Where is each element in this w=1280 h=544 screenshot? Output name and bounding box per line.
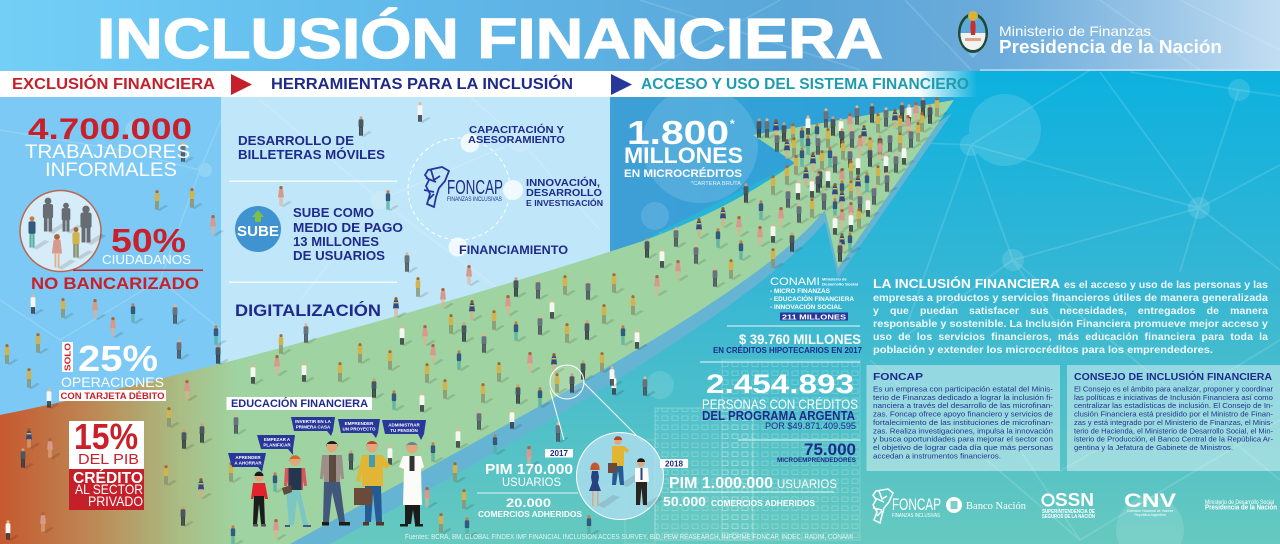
text: definition paragraph: es el acceso y uso de las personas y las — [1064, 279, 1268, 291]
panel: FONCAP: zas. Realiza investigaciones, impulsa la innovación — [873, 426, 1053, 435]
panel: financial inclusion council: El Consejo es el ámbito para analizar, proponer y coordinar — [1074, 384, 1274, 394]
tool: SUBE payment: SUBE COMO — [293, 205, 374, 220]
diagram: FONCAP cycle — [408, 123, 603, 257]
panel: tools background — [221, 97, 610, 400]
stat: 25% debit card: OPERACIONES — [61, 374, 164, 390]
text: definition paragraph: LA INCLUSIÓN FINANCIERA — [873, 276, 1061, 291]
stat: CONAMI: CONAMI — [770, 276, 820, 288]
stat: PIM 2017: 2017 — [550, 449, 569, 458]
text: innovation — [526, 176, 603, 208]
text: training: CAPACITACIÓN Y — [469, 123, 564, 136]
heading: access: ACCESO Y USO DEL SISTEMA FINANCIERO — [641, 76, 969, 93]
tool: digitalization: DIGITALIZACIÓN — [235, 301, 381, 320]
panel: financial inclusion council: terio de Hacienda, el Ministerio de Desarrollo Social, el Min- — [1074, 426, 1274, 435]
figure: man in grey jacket — [320, 441, 350, 526]
panel: financial inclusion council: gentina y la Jefatura de Gabinete de Ministros. — [1074, 443, 1233, 452]
stat: PIM 2017: COMERCIOS ADHERIDOS — [478, 509, 582, 519]
stat: PIM 2018: 50.000 — [663, 494, 706, 509]
stat: PIM 2017: PIM 170.000 — [485, 461, 573, 478]
text: definition paragraph — [873, 276, 1268, 356]
magnifier: zoom lens — [550, 365, 664, 520]
text: definition paragraph: población y extender los microcréditos para los emprendedores. — [873, 344, 1213, 356]
icon: circle of citizens — [20, 190, 106, 272]
speech bubble: project — [338, 419, 380, 438]
stat: 1800 million microcredits: * — [730, 117, 735, 131]
stat: 50% citizens unbanked: 50% — [111, 222, 186, 259]
network pattern — [640, 0, 1280, 544]
figure: yellow man in lens — [608, 436, 643, 487]
stat: PIM 2018: COMERCIOS ADHERIDOS — [711, 498, 815, 508]
stat: CONAMI: - EDUCACIÓN FINANCIERA — [770, 294, 854, 303]
stat: CONAMI: - INNOVACIÓN SOCIAL — [770, 302, 842, 311]
logo: social development ministry — [1205, 500, 1277, 512]
speech bubble: pension — [382, 420, 426, 440]
title: INCLUSIÓN FINANCIERA — [97, 7, 883, 71]
icon: FONCAP map logo — [424, 167, 449, 207]
green growth arrow — [0, 100, 954, 544]
stat: PIM 2017 — [477, 449, 582, 519]
stat: 25% debit card — [59, 338, 166, 401]
text: definition paragraph: uso de los servicios financieros, más educación financiera para toda la — [873, 331, 1268, 343]
heading: financial education: EDUCACIÓN FINANCIERA — [231, 397, 368, 410]
stat: 15% GDP credit: CRÉDITO — [73, 468, 143, 487]
panel: FONCAP: FONCAP — [873, 371, 923, 383]
logo: Banco Nación: Banco Nación — [966, 500, 1026, 512]
stat: mortgage credits: EN CRÉDITOS HIPOTECARIOS EN 2017 — [713, 346, 863, 355]
text: financing: FINANCIAMIENTO — [459, 243, 568, 257]
figure: woman in lens — [589, 462, 620, 508]
stat: 25% debit card: 25% — [78, 338, 158, 379]
stat: Argenta program: POR $49.871.409.595 — [765, 421, 856, 431]
panel: financial inclusion council: centralizar las estadísticas de inclusión. El Consejo de In- — [1074, 401, 1274, 410]
stat: informal workers: TRABAJADORES — [25, 142, 190, 163]
speech bubble: project: UN PROYECTO — [343, 426, 376, 432]
stat: 15% GDP credit: AL SECTOR — [75, 481, 143, 497]
stat: 1800 million microcredits — [624, 114, 743, 187]
logo: CNV: CNV — [1124, 491, 1176, 512]
speech bubble: first home: PRIMERA CASA — [296, 424, 331, 430]
speech bubble: plan: PLANIFICAR — [263, 442, 291, 448]
stat: microentrepreneurs: MICROEMPRENDEDORES — [777, 457, 857, 464]
text: advisory: ASESORAMIENTO — [468, 134, 565, 146]
logo: SSN: SEGUROS DE LA NACIÓN — [1042, 512, 1095, 520]
stat: 50% citizens unbanked: CIUDADANOS — [102, 252, 191, 267]
stat: PIM 2017: USUARIOS — [502, 475, 561, 489]
stat: CONAMI: - MICRO FINANZAS — [770, 288, 831, 295]
logo: SSN: SUPERINTENDENCIA DE — [1042, 509, 1096, 515]
figure: doctor — [399, 442, 424, 526]
panel: FONCAP: el objetivo de lograr cada día que más personas — [873, 443, 1053, 452]
tool: SUBE payment — [293, 205, 403, 263]
stat: PIM 2018 — [660, 459, 837, 509]
sources: Fuentes: BCRA, BM, GLOBAL FINDEX IMF FINANCIAL INCLUSION ACCES SURVEY, BID, PEW REASEARCH, INFORME FONCAP, INDEC, RADIM, CONAMI — [405, 532, 853, 541]
stat: informal workers — [25, 113, 192, 181]
speech bubble: first home: INVERTIR EN LA — [295, 419, 332, 424]
icon: national coat of arms — [958, 11, 988, 58]
stat: 15% GDP credit: PRIVADO — [88, 493, 143, 509]
speech bubble: plan — [257, 435, 295, 455]
ministry name — [999, 23, 1222, 57]
figure: boy in red — [251, 472, 268, 526]
stat: informal workers: 4.700.000 — [28, 113, 192, 146]
stat: PIM 2017: 20.000 — [506, 496, 551, 510]
stat: 25% debit card: SOLO — [62, 343, 72, 371]
arrow shadow band — [280, 113, 952, 544]
stat: 1800 million microcredits: MILLONES — [624, 143, 743, 168]
tool: SUBE payment: MEDIO DE PAGO — [293, 220, 403, 235]
text: definition paragraph: y que puedan satisfacer sus necesidades, entregados de manera — [873, 305, 1268, 317]
speech bubble: save: APRENDER — [235, 455, 261, 460]
stat: PIM 2018: 2018 — [665, 460, 684, 468]
stat: 15% GDP credit — [69, 416, 144, 510]
logo: SSN: SSN — [1055, 490, 1094, 510]
stat: PIM 2018: USUARIOS — [777, 477, 837, 491]
icon: SUBE logo: SUBE — [237, 223, 279, 240]
text: innovation: E INVESTIGACIÓN — [526, 199, 603, 208]
stat: 25% debit card: CON TARJETA DÉBITO — [60, 391, 164, 401]
stat: CONAMI: Desarrollo Social — [822, 282, 858, 286]
stat: 50% citizens unbanked: NO BANCARIZADO — [31, 274, 199, 293]
tool: mobile wallets: DESARROLLO DE — [238, 133, 354, 148]
tool: SUBE payment: 13 MILLONES — [293, 234, 379, 249]
panel: financial inclusion council: CONSEJO DE INCLUSIÓN FINANCIERA — [1074, 370, 1272, 383]
figure: teen with backpack — [282, 455, 311, 527]
text: innovation: INNOVACIÓN, — [526, 176, 600, 189]
ministry name: Presidencia de la Nación — [999, 37, 1222, 57]
stat: CONAMI: Ministerio de — [822, 276, 847, 282]
text: definition paragraph: empresas a productos y servicios financieros útiles de manera generalizada — [873, 292, 1268, 304]
logo: CNV: República Argentina — [1134, 513, 1166, 517]
logo: FONCAP: FINANZAS INCLUSIVAS — [892, 513, 940, 519]
speech bubble: save — [228, 453, 266, 472]
tool: mobile wallets — [238, 133, 385, 162]
panel: FONCAP: accedan a instrumentos financieros. — [873, 451, 1001, 460]
speech bubble: pension: ADMINISTRAR — [388, 422, 420, 428]
logo: FONCAP: FONCAP — [892, 495, 941, 514]
stat: 1800 million microcredits: 1.800 — [627, 114, 729, 151]
tool: mobile wallets: BILLETERAS MÓVILES — [238, 147, 385, 162]
stat: microentrepreneurs: 75.000 — [804, 440, 856, 459]
panel: access background — [610, 97, 954, 254]
heading: tools: HERRAMIENTAS PARA LA INCLUSIÓN — [271, 75, 573, 93]
panel: FONCAP: zas. Foncap ofrece apoyo financiero y servicios de — [873, 410, 1053, 419]
text: FONCAP subtitle: FINANZAS INCLUSIVAS — [447, 197, 502, 203]
text: FONCAP wordmark: FONCAP — [447, 177, 503, 199]
stat: Argenta program — [702, 369, 860, 440]
stat: Argenta program: DEL PROGRAMA ARGENTA — [702, 408, 856, 423]
panel: FONCAP: nanciera a través del desarrollo de las microfinan- — [873, 401, 1054, 410]
panel: financial inclusion council: las políticas e iniciativas de Inclusión Financiera así como — [1074, 393, 1273, 402]
section strip — [0, 71, 977, 97]
arrow: red — [231, 74, 252, 95]
panel: financial inclusion council: zas y está integrado por el Ministerio de Finanzas, el Minis- — [1074, 418, 1274, 427]
stat: CONAMI: 211 MILLONES — [782, 312, 846, 322]
stat: microentrepreneurs — [777, 440, 857, 464]
logo: CNV: Comisión Nacional de Valores — [1127, 509, 1174, 513]
crowd of people — [5, 97, 948, 544]
background network in left panels — [0, 97, 603, 340]
tool: SUBE payment: DE USUARIOS — [293, 248, 385, 263]
panel: FONCAP: y busca oportunidades para mejorar el sector con — [873, 435, 1053, 444]
panel: FONCAP: fortalecimiento de las instituciones de microfinan- — [873, 418, 1054, 427]
panel: exclusion background — [0, 97, 221, 422]
circle behind access stat — [641, 87, 758, 230]
stat: mortgage credits: $ 39.760 MILLONES — [739, 331, 861, 347]
panel: FONCAP — [866, 365, 1060, 471]
figure: white shirt man in lens — [635, 458, 664, 508]
building outlines — [625, 360, 860, 544]
stat: CONAMI — [727, 276, 860, 326]
heading: exclusion: EXCLUSIÓN FINANCIERA — [12, 75, 215, 93]
stat: Argenta program: PERSONAS CON CRÉDITOS — [702, 396, 858, 412]
speech bubble: pension: TU PENSIÓN — [390, 426, 418, 433]
panel: FONCAP: Es un empresa con participación estatal del Minis- — [873, 384, 1054, 394]
ministry name: Ministerio de Finanzas — [999, 23, 1151, 39]
logo: CNV — [1124, 491, 1176, 517]
stat: 15% GDP credit: 15% — [74, 416, 138, 457]
arrow: blue — [611, 74, 632, 95]
stat: PIM 2018: PIM 1.000.000 — [669, 475, 773, 492]
text: innovation: DESARROLLO — [526, 187, 602, 199]
speech bubble: save: A AHORRAR — [234, 460, 262, 466]
icon: SUBE logo — [235, 206, 281, 252]
stat: 1800 million microcredits: *CARTERA BRUTA — [691, 181, 741, 187]
logo: SSN — [1042, 490, 1096, 520]
stat: 50% citizens unbanked — [31, 222, 203, 293]
panel: financial inclusion council: clusión Financiera está presidido por el Ministro de Finan- — [1074, 410, 1274, 419]
speech bubble: project: EMPRENDER — [345, 421, 374, 426]
text: definition paragraph: responsable y sostenible. La Inclusión Financiera promueve mejor acceso y — [873, 318, 1268, 330]
stat: 1800 million microcredits: EN MICROCRÉDITOS — [624, 167, 742, 180]
logo: FONCAP — [873, 489, 941, 523]
panel: FONCAP: terio de Finanzas dedicado a lograr la inclusión fi- — [873, 393, 1054, 402]
stat: mortgage credits — [700, 331, 863, 362]
logo: Banco Nación — [946, 497, 1026, 513]
stat: 15% GDP credit: DEL PIB — [78, 451, 139, 468]
figure: man in yellow with briefcase — [354, 441, 390, 526]
speech bubble: plan: EMPEZAR A — [264, 437, 291, 442]
panel: financial inclusion council — [1067, 365, 1280, 471]
speech bubble: first home — [291, 417, 335, 436]
stat: informal workers: INFORMALES — [45, 160, 177, 181]
stat: Argenta program: 2.454.893 — [706, 369, 854, 399]
panel: financial inclusion council: isterio de Producción, el Banco Central de la República Ar- — [1074, 435, 1274, 444]
